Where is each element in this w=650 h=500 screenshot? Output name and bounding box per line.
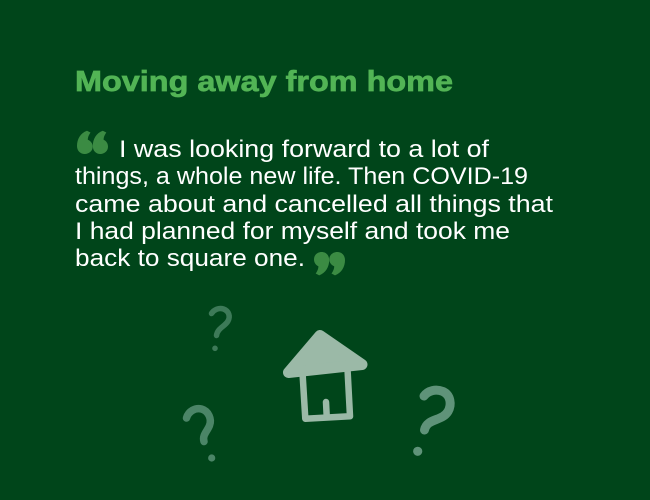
icon: right question mark [413,390,450,456]
quote text: I had planned for myself and took me [75,218,510,245]
quote text: things, a whole new life. Then COVID-19 [75,163,528,190]
quote text: came about and cancelled all things that [75,191,553,218]
title: Moving away from home [75,66,453,98]
icon: small question mark [212,309,229,351]
icon: closing quotation mark [314,252,345,275]
house walls [303,369,350,419]
quote text [75,136,553,272]
house roof [288,336,362,372]
icon: opening quotation mark [77,131,108,154]
quote text: back to square one. [75,245,305,272]
icon: house [288,336,362,419]
quote text: I was looking forward to a lot of [119,136,489,163]
house door [323,402,330,416]
icon: left question mark [186,409,215,462]
